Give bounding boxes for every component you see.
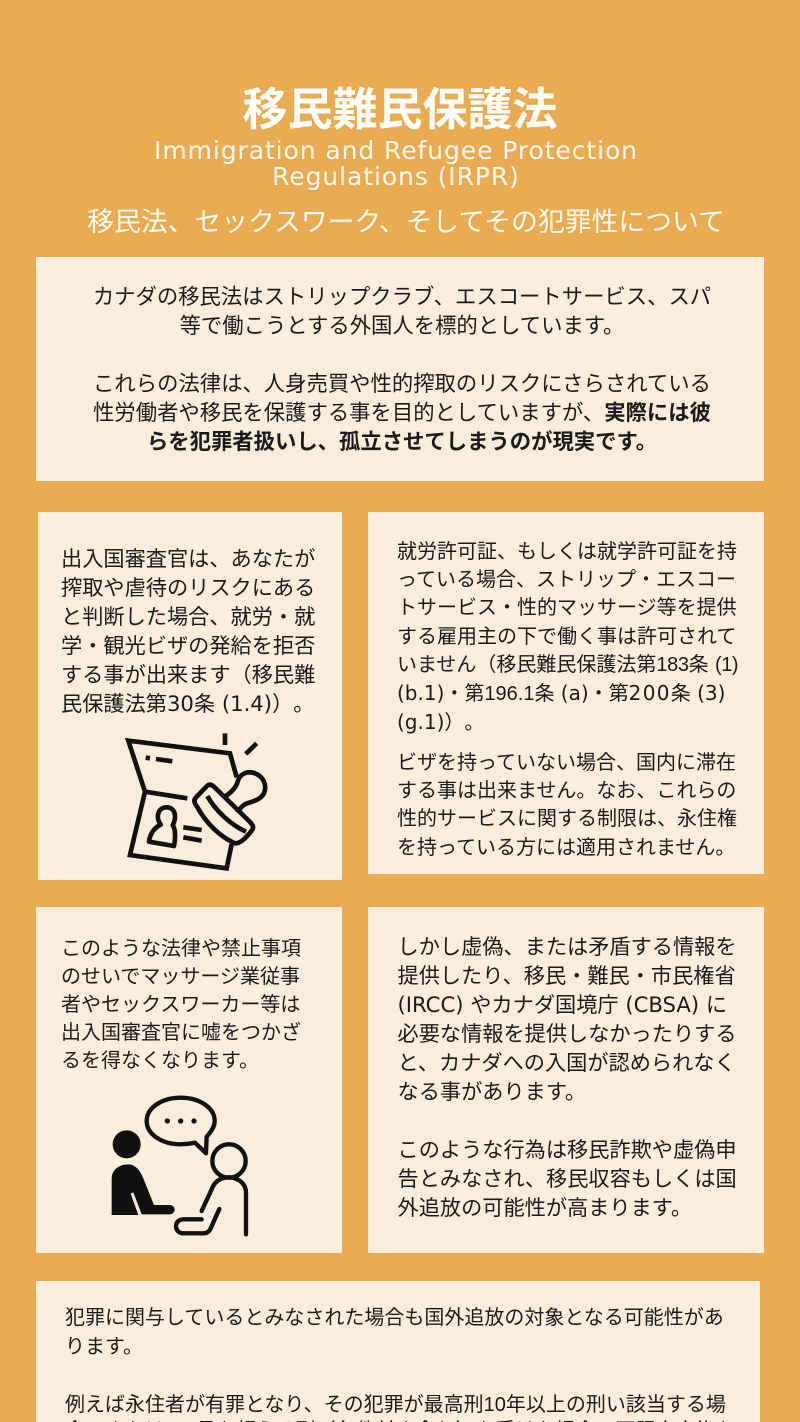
subtitle: Japanese: 移民法、セックスワーク、そしてその犯罪性について bbox=[87, 200, 725, 239]
text block: forced to lie: このような法律や禁止事項 bbox=[61, 936, 301, 960]
text block: forced to lie: のせいでマッサージ業従事 bbox=[61, 964, 300, 988]
text block: false information bbox=[398, 934, 737, 1104]
text block: forced to lie: 出入国審査官に嘘をつかざ bbox=[61, 1020, 301, 1044]
text block: forced to lie: 者やセックスワーカー等は bbox=[61, 992, 300, 1016]
text block: work permit restrictions bbox=[397, 539, 738, 734]
text block: introduction paragraph 2: らを犯罪者扱いし、孤立させてしまうのが現実です。 bbox=[147, 430, 657, 455]
subtitle: English name bbox=[154, 136, 638, 191]
text block: forced to lie: るを得なくなります。 bbox=[61, 1048, 259, 1072]
text block: criminality paragraph 1 bbox=[65, 1305, 724, 1358]
subtitle: English name: Regulations (IRPR) bbox=[272, 162, 520, 191]
text block: consequences bbox=[398, 1137, 737, 1220]
text block: criminality paragraph 2: 例えば永住者が有罪となり、その犯罪が最高刑10年以上の刑い該当する場 bbox=[65, 1392, 726, 1416]
panel: work permit restrictions bbox=[368, 512, 764, 874]
panel: false information bbox=[368, 907, 764, 1253]
text block: visa refusal: する事が出来ます（移民難 bbox=[61, 662, 315, 687]
text block: work permit restrictions: する雇用主の下で働く事は許可されて bbox=[397, 624, 736, 648]
text block: criminality paragraph 1: ります。 bbox=[65, 1334, 143, 1358]
text block: visa refusal: と判断した場合、就労・就 bbox=[61, 604, 315, 629]
text block: false information: と、カナダへの入国が認められなく bbox=[398, 1050, 736, 1075]
text block: consequences: このような行為は移民詐欺や虚偽申 bbox=[398, 1137, 737, 1162]
panel: visa refusal bbox=[38, 512, 342, 880]
text block: no visa: する事は出来ません。なお、これらの bbox=[397, 778, 736, 802]
text block: visa refusal: 搾取や虐待のリスクにある bbox=[61, 575, 315, 600]
text block: no visa: ビザを持っていない場合、国内に滞在 bbox=[397, 750, 736, 774]
panel: criminality bbox=[36, 1281, 760, 1422]
text block: work permit restrictions: トサービス・性的マッサージ等を提供 bbox=[397, 595, 737, 619]
text block: introduction paragraph 1: カナダの移民法はストリップクラブ、エスコートサービス、スパ bbox=[93, 285, 711, 310]
text block: work permit restrictions: (b.1)・第196.1条 (a)・第200条 (3) bbox=[397, 681, 725, 705]
text block: introduction paragraph 2: これらの法律は、人身売買や性的搾取のリスクにさらされている bbox=[93, 372, 711, 397]
text block: false information: 提供したり、移民・難民・市民権省 bbox=[398, 963, 736, 988]
text block: introduction paragraph 2 bbox=[93, 372, 711, 455]
text block: work permit restrictions: 就労許可証、もしくは就学許可証を持 bbox=[397, 539, 737, 563]
text block: false information: 必要な情報を提供しなかったりする bbox=[398, 1021, 737, 1046]
text block: false information: なる事があります。 bbox=[398, 1079, 586, 1104]
text block: false information: しかし虚偽、または矛盾する情報を bbox=[398, 934, 737, 959]
text block: no visa: を持っている方には適用されません。 bbox=[397, 835, 735, 859]
text block: consequences: 告とみなされ、移民収容もしくは国 bbox=[398, 1166, 737, 1191]
icon: two people talking bbox=[112, 1096, 248, 1236]
text block: consequences: 外追放の可能性が高まります。 bbox=[398, 1195, 692, 1220]
text block: introduction paragraph 1: 等で働こうとする外国人を標的としています。 bbox=[180, 314, 624, 339]
text block: visa refusal: 学・観光ビザの発給を拒否 bbox=[61, 633, 315, 658]
text block: visa refusal: 民保護法第30条 (1.4)）。 bbox=[61, 691, 314, 716]
text block: no visa: 性的サービスに関する制限は、永住権 bbox=[397, 806, 737, 830]
text block: work permit restrictions: (g.1)）。 bbox=[397, 710, 484, 734]
text block: introduction paragraph 2: 性労働者や移民を保護する事を目的としていますが、実際には彼 bbox=[93, 401, 711, 426]
text block: forced to lie bbox=[61, 936, 301, 1072]
text block: work permit restrictions: っている場合、ストリップ・エスコー bbox=[397, 567, 736, 591]
text block: work permit restrictions: いません（移民難民保護法第183条 (1) bbox=[397, 652, 738, 676]
title: 移民難民保護法 bbox=[242, 73, 558, 138]
panel: forced to lie bbox=[36, 907, 342, 1253]
subtitle: English name: Immigration and Refugee Protection bbox=[154, 136, 638, 165]
text block: visa refusal: 出入国審査官は、あなたが bbox=[61, 546, 315, 571]
text block: visa refusal bbox=[61, 546, 315, 716]
text block: introduction paragraph 1 bbox=[93, 285, 711, 339]
panel: introduction bbox=[36, 257, 764, 481]
text block: criminality paragraph 1: 犯罪に関与しているとみなされた場合も国外追放の対象となる可能性があ bbox=[65, 1305, 724, 1329]
text block: false information: (IRCC) やカナダ国境庁 (CBSA) に bbox=[398, 992, 727, 1017]
icon: passport and stamp bbox=[125, 733, 268, 871]
text block: no visa bbox=[397, 750, 737, 859]
